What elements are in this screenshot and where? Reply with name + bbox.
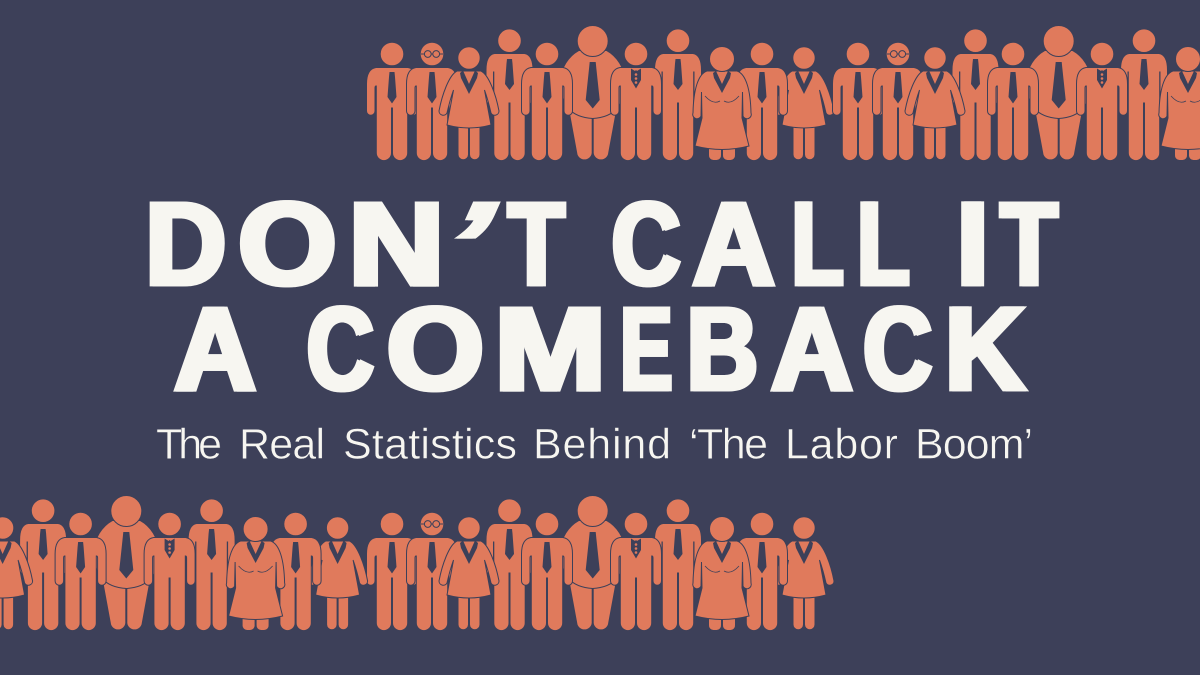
figure: man with tie — [366, 42, 418, 161]
subtitle: Behind — [533, 420, 671, 468]
title: A Comeback: C — [862, 283, 930, 415]
title: Don't Call It: I — [956, 178, 987, 310]
figure: tall man with tie — [486, 29, 533, 161]
title: A Comeback: E — [619, 284, 671, 416]
title: A Comeback: M — [493, 283, 605, 415]
figure: man with tie — [522, 42, 572, 161]
figure: man with tie — [736, 42, 788, 161]
subtitle: Real — [239, 420, 325, 468]
figure: heavy woman in dress — [693, 46, 751, 161]
top row repeat — [832, 26, 1200, 161]
subtitle: Labor — [785, 420, 898, 468]
figure: woman in skirt suit — [774, 47, 834, 160]
title: Don't Call It: T — [999, 178, 1056, 310]
title: A Comeback: A — [173, 284, 254, 415]
subtitle — [156, 420, 1033, 468]
subtitle: ‘The — [689, 420, 768, 468]
title: Don't Call It: L — [790, 178, 842, 310]
title: A Comeback: B — [685, 284, 756, 416]
title: A Comeback: C — [306, 284, 372, 415]
title: A Comeback: O — [385, 283, 482, 415]
top row of worker figures — [366, 26, 834, 161]
title: Don't Call It: O — [237, 178, 335, 310]
title: Don't Call It: ’ — [417, 178, 516, 310]
subtitle: The — [156, 420, 222, 468]
title: Don't Call It: L — [856, 178, 908, 310]
title: Don't Call It: C — [610, 178, 679, 310]
subtitle: Statistics — [343, 420, 517, 468]
figure: woman in skirt suit — [439, 47, 499, 160]
subtitle: Boom’ — [915, 420, 1033, 468]
title: A Comeback: K — [944, 283, 1023, 416]
title: Don't Call It: D — [144, 179, 225, 310]
figure: man with glasses — [406, 42, 458, 161]
title: Don't Call It: T — [507, 179, 563, 310]
title: Don't Call It — [144, 177, 1059, 310]
figure: heavy man with tie — [560, 26, 625, 160]
figure: man in vest and bow tie — [610, 42, 662, 161]
bottom row of worker figures — [366, 496, 834, 631]
bottom row left repeat — [0, 496, 368, 631]
figure: tall man with tie — [654, 29, 702, 161]
title: A Comeback: A — [770, 284, 851, 415]
title: A Comeback — [173, 283, 1026, 416]
title: Don't Call It: N — [347, 177, 443, 310]
title: Don't Call It: A — [691, 178, 773, 310]
